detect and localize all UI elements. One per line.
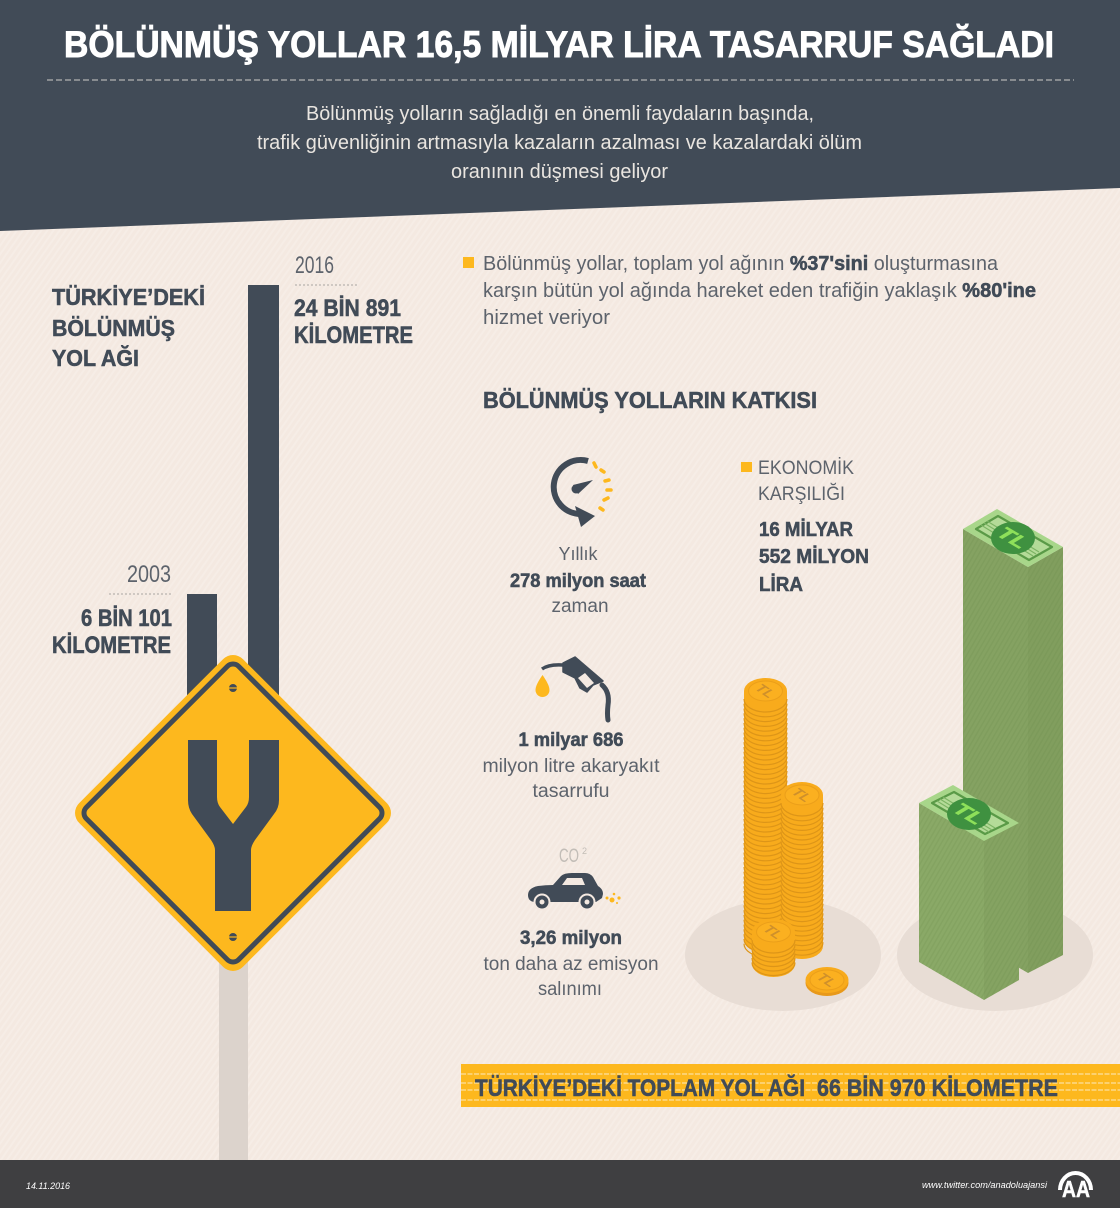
subtitle: trafik güvenliğinin artmasıyla kazaların azalması ve kazalardaki ölüm xyxy=(257,132,862,154)
economic value label xyxy=(741,458,869,596)
subtitle: oranının düşmesi geliyor xyxy=(451,161,668,183)
icon: speedometer clock xyxy=(554,460,611,527)
text: fuel saving: milyon litre akaryakıt xyxy=(482,756,660,777)
footer: www.twitter.com/anadoluajansi xyxy=(922,1180,1048,1190)
intro bullet text xyxy=(463,253,1036,329)
money stack tall xyxy=(963,509,1063,973)
icon: car with CO2: CO xyxy=(559,846,579,867)
label 2003: KİLOMETRE xyxy=(52,632,171,659)
road network heading xyxy=(52,284,205,371)
road network heading: TÜRKİYE’DEKİ xyxy=(52,284,205,310)
economic value label: KARŞILIĞI xyxy=(758,483,845,505)
icon: fuel nozzle xyxy=(536,657,608,720)
label 2016: 24 BİN 891 xyxy=(294,295,401,322)
subtitle xyxy=(257,103,862,183)
coin stack short: TL xyxy=(758,924,787,941)
subtitle: Bölünmüş yolların sağladığı en önemli faydaların başında, xyxy=(306,103,814,125)
coin stack tall: TL xyxy=(750,683,779,700)
text: time saving: Yıllık xyxy=(558,544,598,564)
road network heading: BÖLÜNMÜŞ xyxy=(52,315,175,341)
footer: 14.11.2016 xyxy=(26,1181,70,1191)
intro bullet text: Bölünmüş yollar, toplam yol ağının %37'sini oluşturmasına xyxy=(483,253,999,275)
icon: agency logo: AA xyxy=(1062,1176,1090,1202)
bar 2016 xyxy=(248,285,279,724)
text: emissions xyxy=(484,927,658,1000)
text: emissions: 3,26 milyon xyxy=(520,927,622,949)
money stack short xyxy=(919,785,1019,1000)
intro bullet text: hizmet veriyor xyxy=(483,307,610,329)
economic value label: LİRA xyxy=(759,573,803,596)
total road network band: TÜRKİYE’DEKİ TOPLAM YOL AĞI xyxy=(475,1074,805,1102)
text: time saving: zaman xyxy=(551,596,609,617)
text: emissions: ton daha az emisyon xyxy=(484,954,658,975)
economic value label: 552 MİLYON xyxy=(759,545,869,568)
text: time saving xyxy=(510,544,647,617)
label 2003: 6 BİN 101 xyxy=(81,605,172,632)
shadows under stacks xyxy=(685,899,1093,1011)
intro bullet text: karşın bütün yol ağında hareket eden trafiğin yaklaşık %80'ine xyxy=(483,280,1036,302)
money stack short: TL xyxy=(947,801,992,827)
section heading: BÖLÜNMÜŞ YOLLARIN KATKISI xyxy=(483,387,817,413)
single coin: TL xyxy=(812,972,841,989)
road network heading: YOL AĞI xyxy=(52,344,139,371)
sign post xyxy=(219,960,248,1160)
label 2003 xyxy=(52,561,172,659)
total road network band xyxy=(461,1064,1120,1107)
header banner xyxy=(0,0,1120,231)
icon: car with CO2 xyxy=(528,846,621,910)
footer xyxy=(0,1160,1120,1208)
economic value label: 16 MİLYAR xyxy=(759,518,853,541)
label 2016 xyxy=(294,252,413,349)
coin stack medium xyxy=(781,782,823,959)
icon: car with CO2: 2 xyxy=(582,846,587,856)
total road network band: 66 BİN 970 KİLOMETRE xyxy=(817,1075,1058,1102)
coin stack medium: TL xyxy=(787,787,816,804)
road sign xyxy=(69,649,397,977)
text: time saving: 278 milyon saat xyxy=(510,571,647,592)
coin stack tall xyxy=(744,678,787,957)
text: fuel saving: tasarrufu xyxy=(532,781,610,802)
label 2003: 2003 xyxy=(127,561,171,588)
economic value label: EKONOMİK xyxy=(758,458,854,479)
text: fuel saving xyxy=(482,729,660,802)
coin stack short xyxy=(752,919,795,977)
single coin xyxy=(806,967,848,996)
title: BÖLÜNMÜŞ YOLLAR 16,5 MİLYAR LİRA TASARRUF SAĞLADI xyxy=(64,24,1054,65)
bar 2003 xyxy=(187,594,217,724)
money stack tall: TL xyxy=(991,525,1036,551)
text: fuel saving: 1 milyar 686 xyxy=(518,729,624,751)
label 2016: KİLOMETRE xyxy=(294,322,413,349)
text: emissions: salınımı xyxy=(538,979,602,1000)
label 2016: 2016 xyxy=(295,252,334,279)
